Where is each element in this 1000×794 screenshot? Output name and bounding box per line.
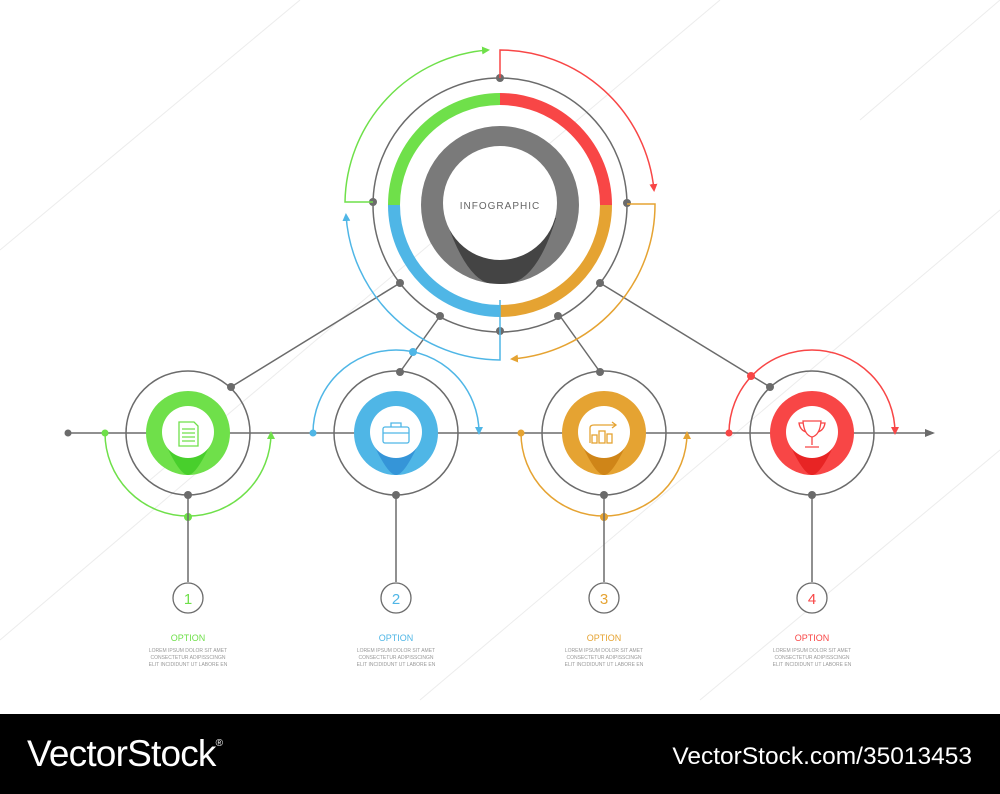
text blocks: CONSECTETUR ADIPISSCINGN — [358, 655, 434, 661]
footer bar: VectorStock — [27, 733, 216, 774]
icon: briefcase — [383, 423, 409, 443]
node 3: 3 — [600, 591, 608, 608]
hub label: INFOGRAPHIC — [460, 201, 540, 212]
node 4 — [726, 350, 895, 613]
text blocks: LOREM IPSUM DOLOR SIT AMET — [773, 648, 851, 654]
hub arrows — [345, 50, 655, 360]
icon: document — [179, 422, 198, 446]
text blocks: ELIT INCIDIDUNT UT LABORE EN — [565, 662, 644, 668]
icon: chart — [590, 422, 616, 443]
text blocks: CONSECTETUR ADIPISSCINGN — [774, 655, 850, 661]
text blocks: ELIT INCIDIDUNT UT LABORE EN — [149, 662, 228, 668]
main hub — [369, 74, 631, 335]
footer bar: VectorStock.com/35013453 — [672, 743, 972, 770]
text blocks: OPTION — [171, 633, 205, 643]
text blocks: CONSECTETUR ADIPISSCINGN — [150, 655, 226, 661]
icon: trophy — [799, 421, 825, 447]
text blocks — [149, 633, 852, 668]
text blocks: ELIT INCIDIDUNT UT LABORE EN — [357, 662, 436, 668]
text blocks: LOREM IPSUM DOLOR SIT AMET — [149, 648, 227, 654]
text blocks: OPTION — [379, 633, 413, 643]
text blocks: LOREM IPSUM DOLOR SIT AMET — [357, 648, 435, 654]
node 1: 1 — [184, 591, 192, 608]
footer bar: ® — [216, 738, 224, 749]
node 2 — [310, 348, 479, 613]
text blocks: ELIT INCIDIDUNT UT LABORE EN — [773, 662, 852, 668]
text blocks: LOREM IPSUM DOLOR SIT AMET — [565, 648, 643, 654]
node 3 — [518, 368, 687, 613]
text blocks: OPTION — [795, 633, 829, 643]
text blocks: OPTION — [587, 633, 621, 643]
node 4: 4 — [808, 591, 816, 608]
footer bar — [0, 714, 1000, 794]
node 1 — [102, 371, 271, 613]
connectors — [231, 283, 770, 387]
timeline — [64, 430, 933, 436]
text blocks: CONSECTETUR ADIPISSCINGN — [566, 655, 642, 661]
node 2: 2 — [392, 591, 400, 608]
